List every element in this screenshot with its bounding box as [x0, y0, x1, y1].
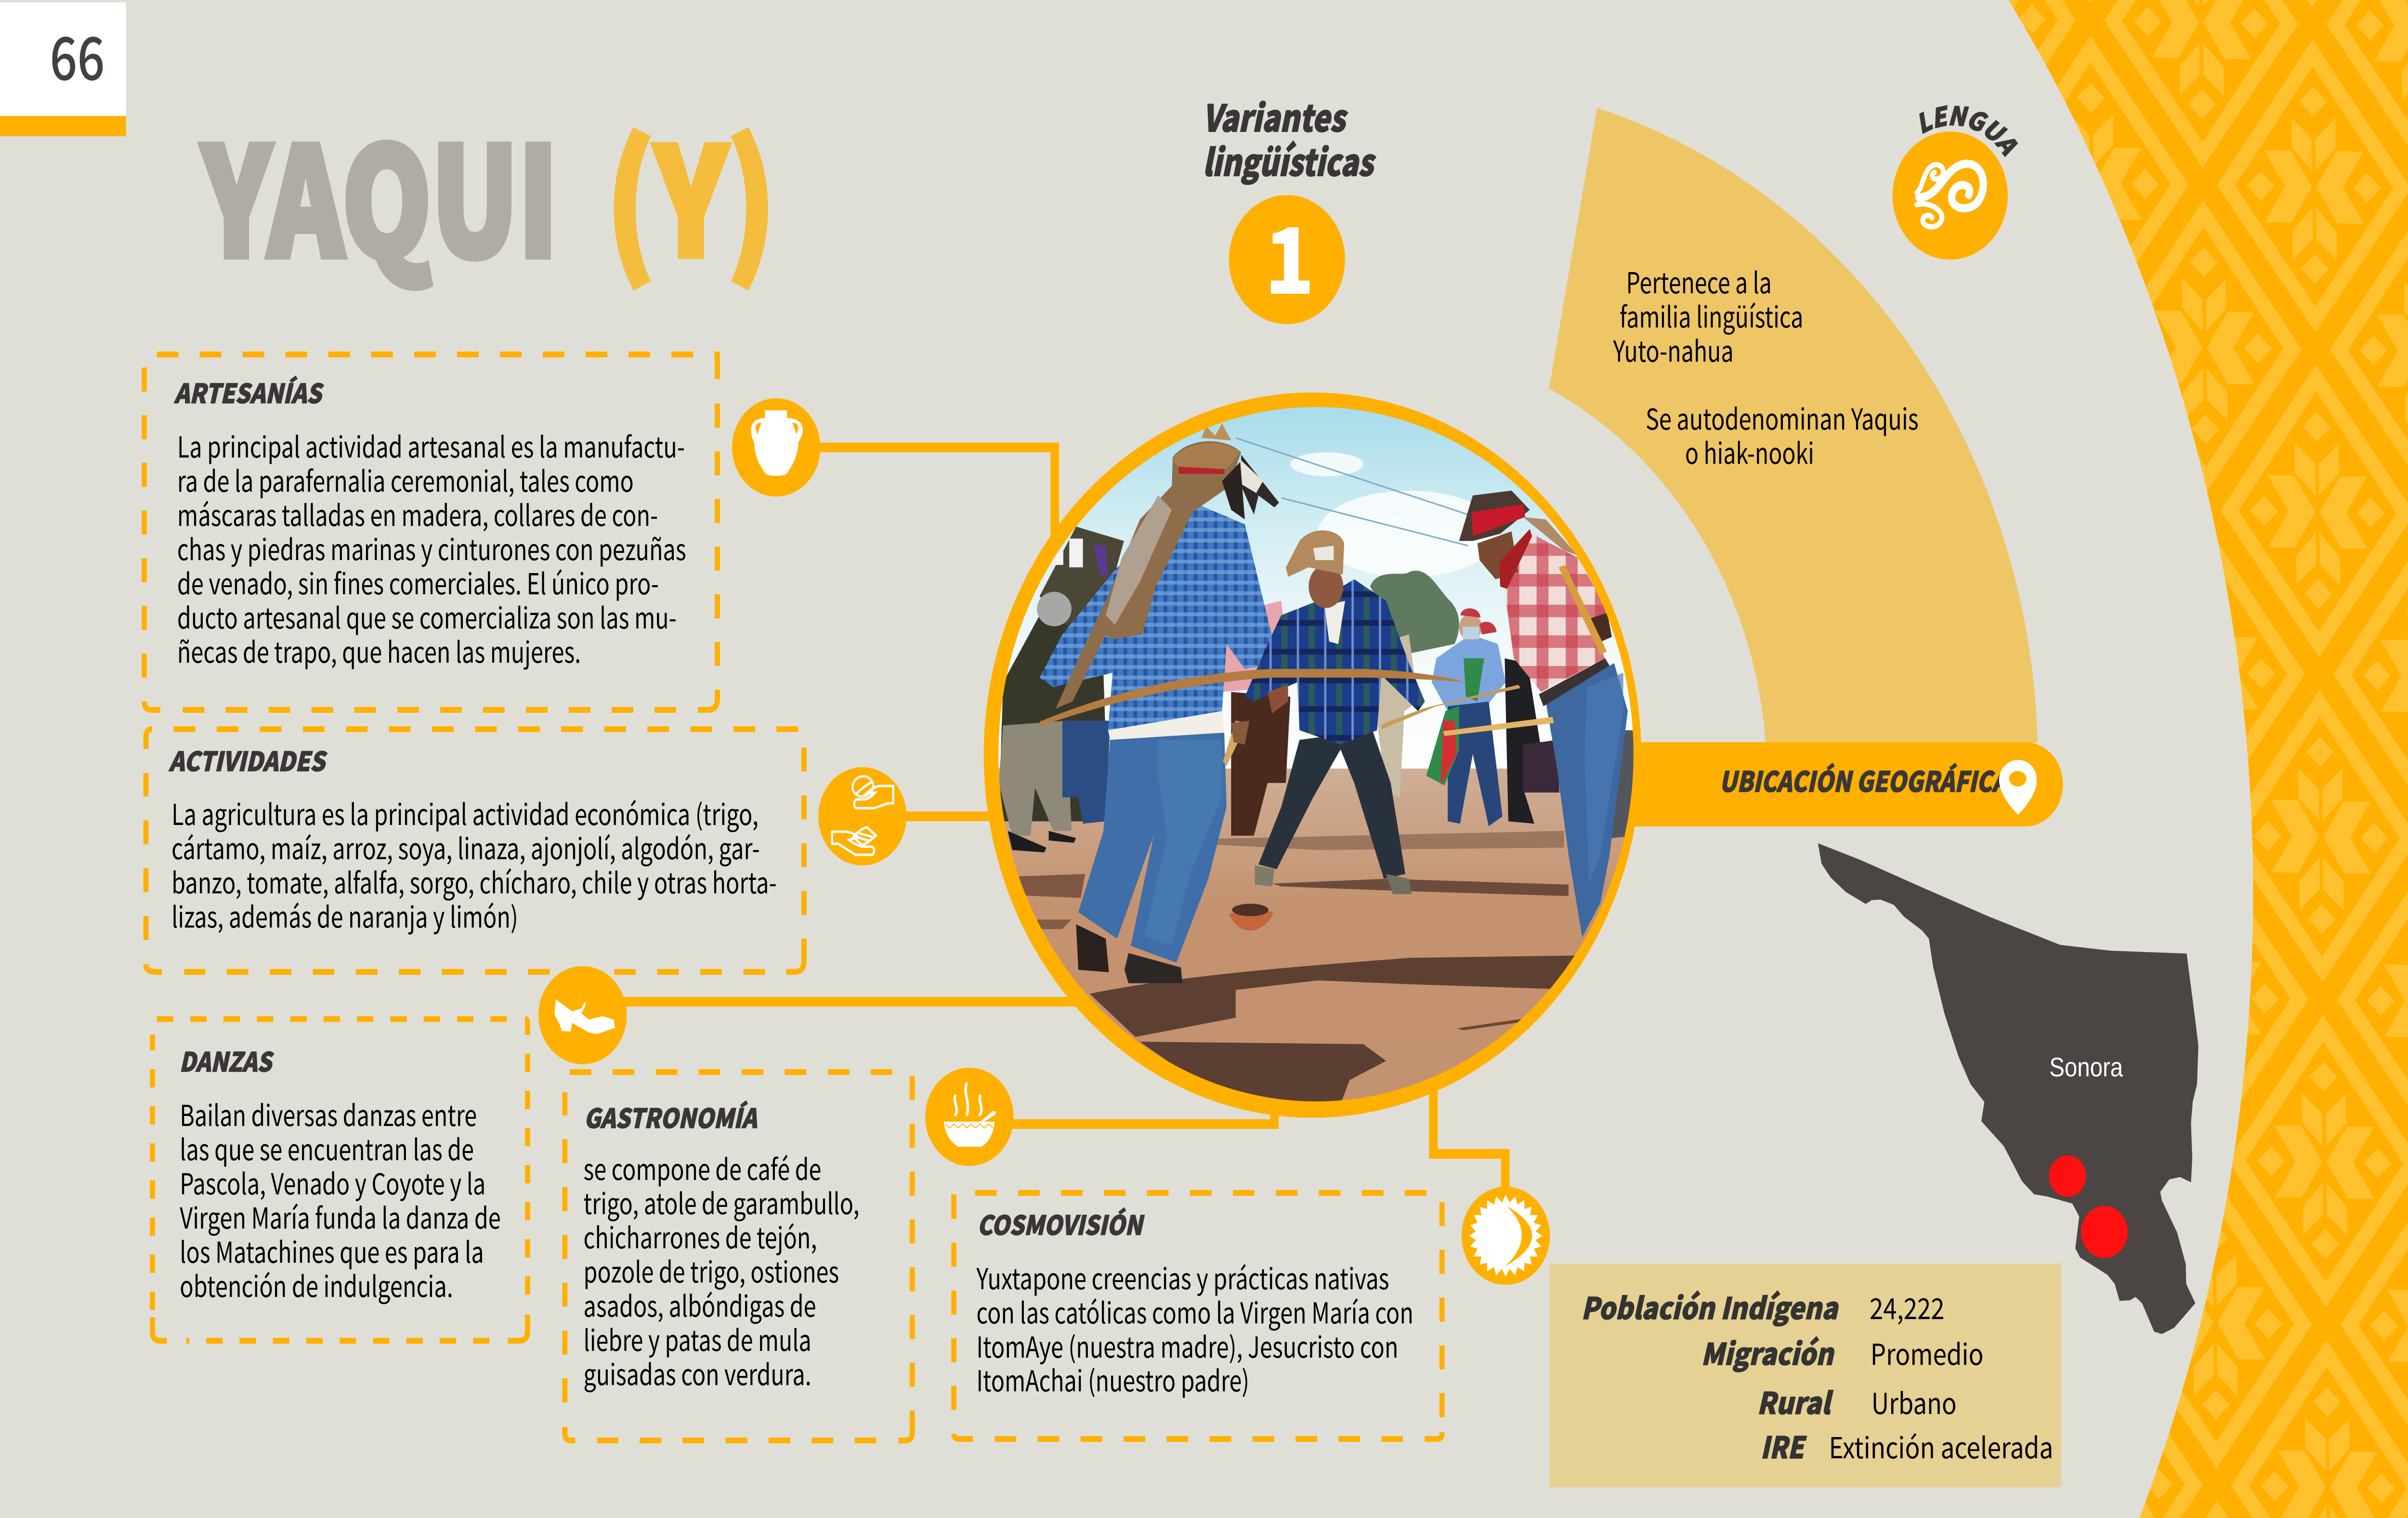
- central photo: danza in orange ring: [984, 393, 1641, 1118]
- panel: artesanías: ARTESANÍAS: [174, 373, 324, 411]
- panel: population statistics: Rural: [1757, 1380, 1833, 1423]
- panel: actividades: La agricultura es la principal actividad económica (trigo,: [171, 792, 759, 834]
- panel: danzas: los Matachines que es para la: [180, 1230, 484, 1271]
- panel: danzas: DANZAS: [179, 1041, 274, 1080]
- panel: lengua fan: Se autodenominan Yaquis: [1646, 397, 1919, 438]
- panel: gastronomía: [565, 1072, 912, 1440]
- panel: population statistics: Migración: [1701, 1331, 1835, 1374]
- icon: clay jug: [732, 398, 821, 497]
- page number tab: 66: [50, 11, 105, 97]
- sky: [994, 400, 1641, 783]
- panel: gastronomía: guisadas con verdura.: [584, 1352, 811, 1394]
- background crowd: [998, 592, 1637, 852]
- map: Sonora: Sonora: [2049, 1053, 2123, 1083]
- panel: cosmovisión: ItomAchai (nuestro padre): [976, 1359, 1249, 1400]
- clay bowl: [1230, 903, 1273, 930]
- panel: danzas: Pascola, Venado y Coyote y la: [180, 1162, 485, 1203]
- panel: population statistics: 24,222: [1870, 1286, 1945, 1328]
- badge: one linguistic variant: [1229, 188, 1345, 324]
- panel: cosmovisión: con las católicas como la Virgen María con: [976, 1291, 1413, 1332]
- panel: lengua fan: [1549, 108, 2038, 743]
- title: YAQUI (Y): (Y): [606, 83, 775, 299]
- icon: lengua swirl with curved label: LENGUA: [1919, 105, 2018, 157]
- band: ubicación geográfica: UBICACIÓN GEOGRÁFICA: [1719, 759, 2008, 800]
- panel: danzas: Virgen María funda la danza de: [180, 1196, 501, 1237]
- panel: gastronomía: se compone de café de: [584, 1147, 821, 1189]
- map: Sonora: [1818, 843, 2199, 1334]
- panel: gastronomía: pozole de trigo, ostiones: [584, 1250, 839, 1291]
- panel: actividades: ACTIVIDADES: [169, 741, 327, 779]
- heading: variantes lingüísticas: [1203, 89, 1376, 186]
- panel: gastronomía: trigo, atole de garambullo,: [584, 1181, 859, 1223]
- panel: population statistics: Urbano: [1871, 1381, 1957, 1423]
- panel: actividades: banzo, tomate, alfalfa, sorgo, chícharo, chile y otras horta-: [171, 861, 777, 902]
- panel: danzas: Bailan diversas danzas entre: [180, 1093, 477, 1135]
- band: ubicación geográfica: [1581, 742, 2063, 826]
- panel: artesanías: chas y piedras marinas y cinturones con pezuñas: [177, 527, 686, 569]
- panel: danzas: [153, 1019, 528, 1341]
- panel: gastronomía: GASTRONOMÍA: [584, 1098, 757, 1136]
- panel: artesanías: ñecas de trapo, que hacen las mujeres.: [177, 630, 581, 671]
- badge: one linguistic variant: 1: [1265, 188, 1315, 321]
- heading: variantes lingüísticas: lingüísticas: [1203, 133, 1376, 186]
- panel: population statistics: Promedio: [1871, 1332, 1984, 1374]
- panel: cosmovisión: Yuxtapone creencias y prácticas nativas: [976, 1256, 1389, 1298]
- panel: artesanías: de venado, sin fines comerciales. El único pro-: [177, 562, 659, 603]
- icon: hands with seeds: [818, 767, 907, 865]
- panel: population statistics: Población Indígena: [1581, 1285, 1839, 1328]
- panel: artesanías: La principal actividad artesanal es la manufactu-: [177, 425, 685, 466]
- panel: artesanías: máscaras talladas en madera, collares de con-: [177, 493, 658, 535]
- panel: population statistics: [1549, 1264, 2061, 1487]
- panel: lengua fan: o hiak-nooki: [1685, 431, 1814, 472]
- panel: danzas: obtención de indulgencia.: [180, 1264, 453, 1306]
- heading: variantes lingüísticas: Variantes: [1203, 89, 1348, 142]
- panel: cosmovisión: ItomAye (nuestra madre), Jesucristo con: [976, 1325, 1398, 1366]
- icon: lengua swirl with curved label: [1893, 105, 2018, 260]
- panel: danzas: las que se encuentran las de: [180, 1127, 474, 1169]
- icon: dance shoe: [538, 966, 627, 1064]
- panel: lengua fan: Yuto-nahua: [1613, 329, 1734, 370]
- panel: population statistics: IRE: [1760, 1424, 1806, 1467]
- panel: actividades: [146, 729, 804, 972]
- centre dancer: [1223, 530, 1425, 894]
- bow and sticks: [1040, 669, 1554, 736]
- panel: actividades: cártamo, maíz, arroz, soya, linaza, ajonjolí, algodón, gar-: [171, 826, 760, 868]
- trees and hedge: [1040, 526, 1459, 654]
- panel: actividades: lizas, además de naranja y limón): [171, 895, 518, 936]
- panel: gastronomía: liebre y patas de mula: [584, 1318, 811, 1360]
- panel: cosmovisión: COSMOVISIÓN: [977, 1204, 1145, 1243]
- panel: artesanías: [144, 354, 717, 710]
- ground: [994, 769, 1641, 1109]
- panel: lengua fan: Pertenece a la: [1626, 261, 1772, 302]
- left dancer: [1040, 424, 1297, 983]
- panel: gastronomía: asados, albóndigas de: [584, 1284, 816, 1325]
- title: YAQUI (Y): YAQUI: [200, 83, 558, 299]
- panel: population statistics: Extinción acelerada: [1829, 1426, 2053, 1467]
- right dancer: [1459, 491, 1628, 937]
- icon: sun and moon: [1462, 1187, 1550, 1285]
- panel: lengua fan: familia lingüística: [1620, 295, 1803, 336]
- page number tab: [0, 2, 126, 136]
- panel: artesanías: ducto artesanal que se comercializa son las mu-: [177, 596, 677, 637]
- panel: artesanías: ra de la parafernalia ceremonial, tales como: [177, 459, 634, 500]
- icon: steaming bowl: [925, 1068, 1014, 1166]
- connector lines from icons to photo: [624, 447, 1505, 1190]
- panel: cosmovisión: [954, 1193, 1442, 1439]
- panel: gastronomía: chicharrones de tejón,: [584, 1216, 817, 1257]
